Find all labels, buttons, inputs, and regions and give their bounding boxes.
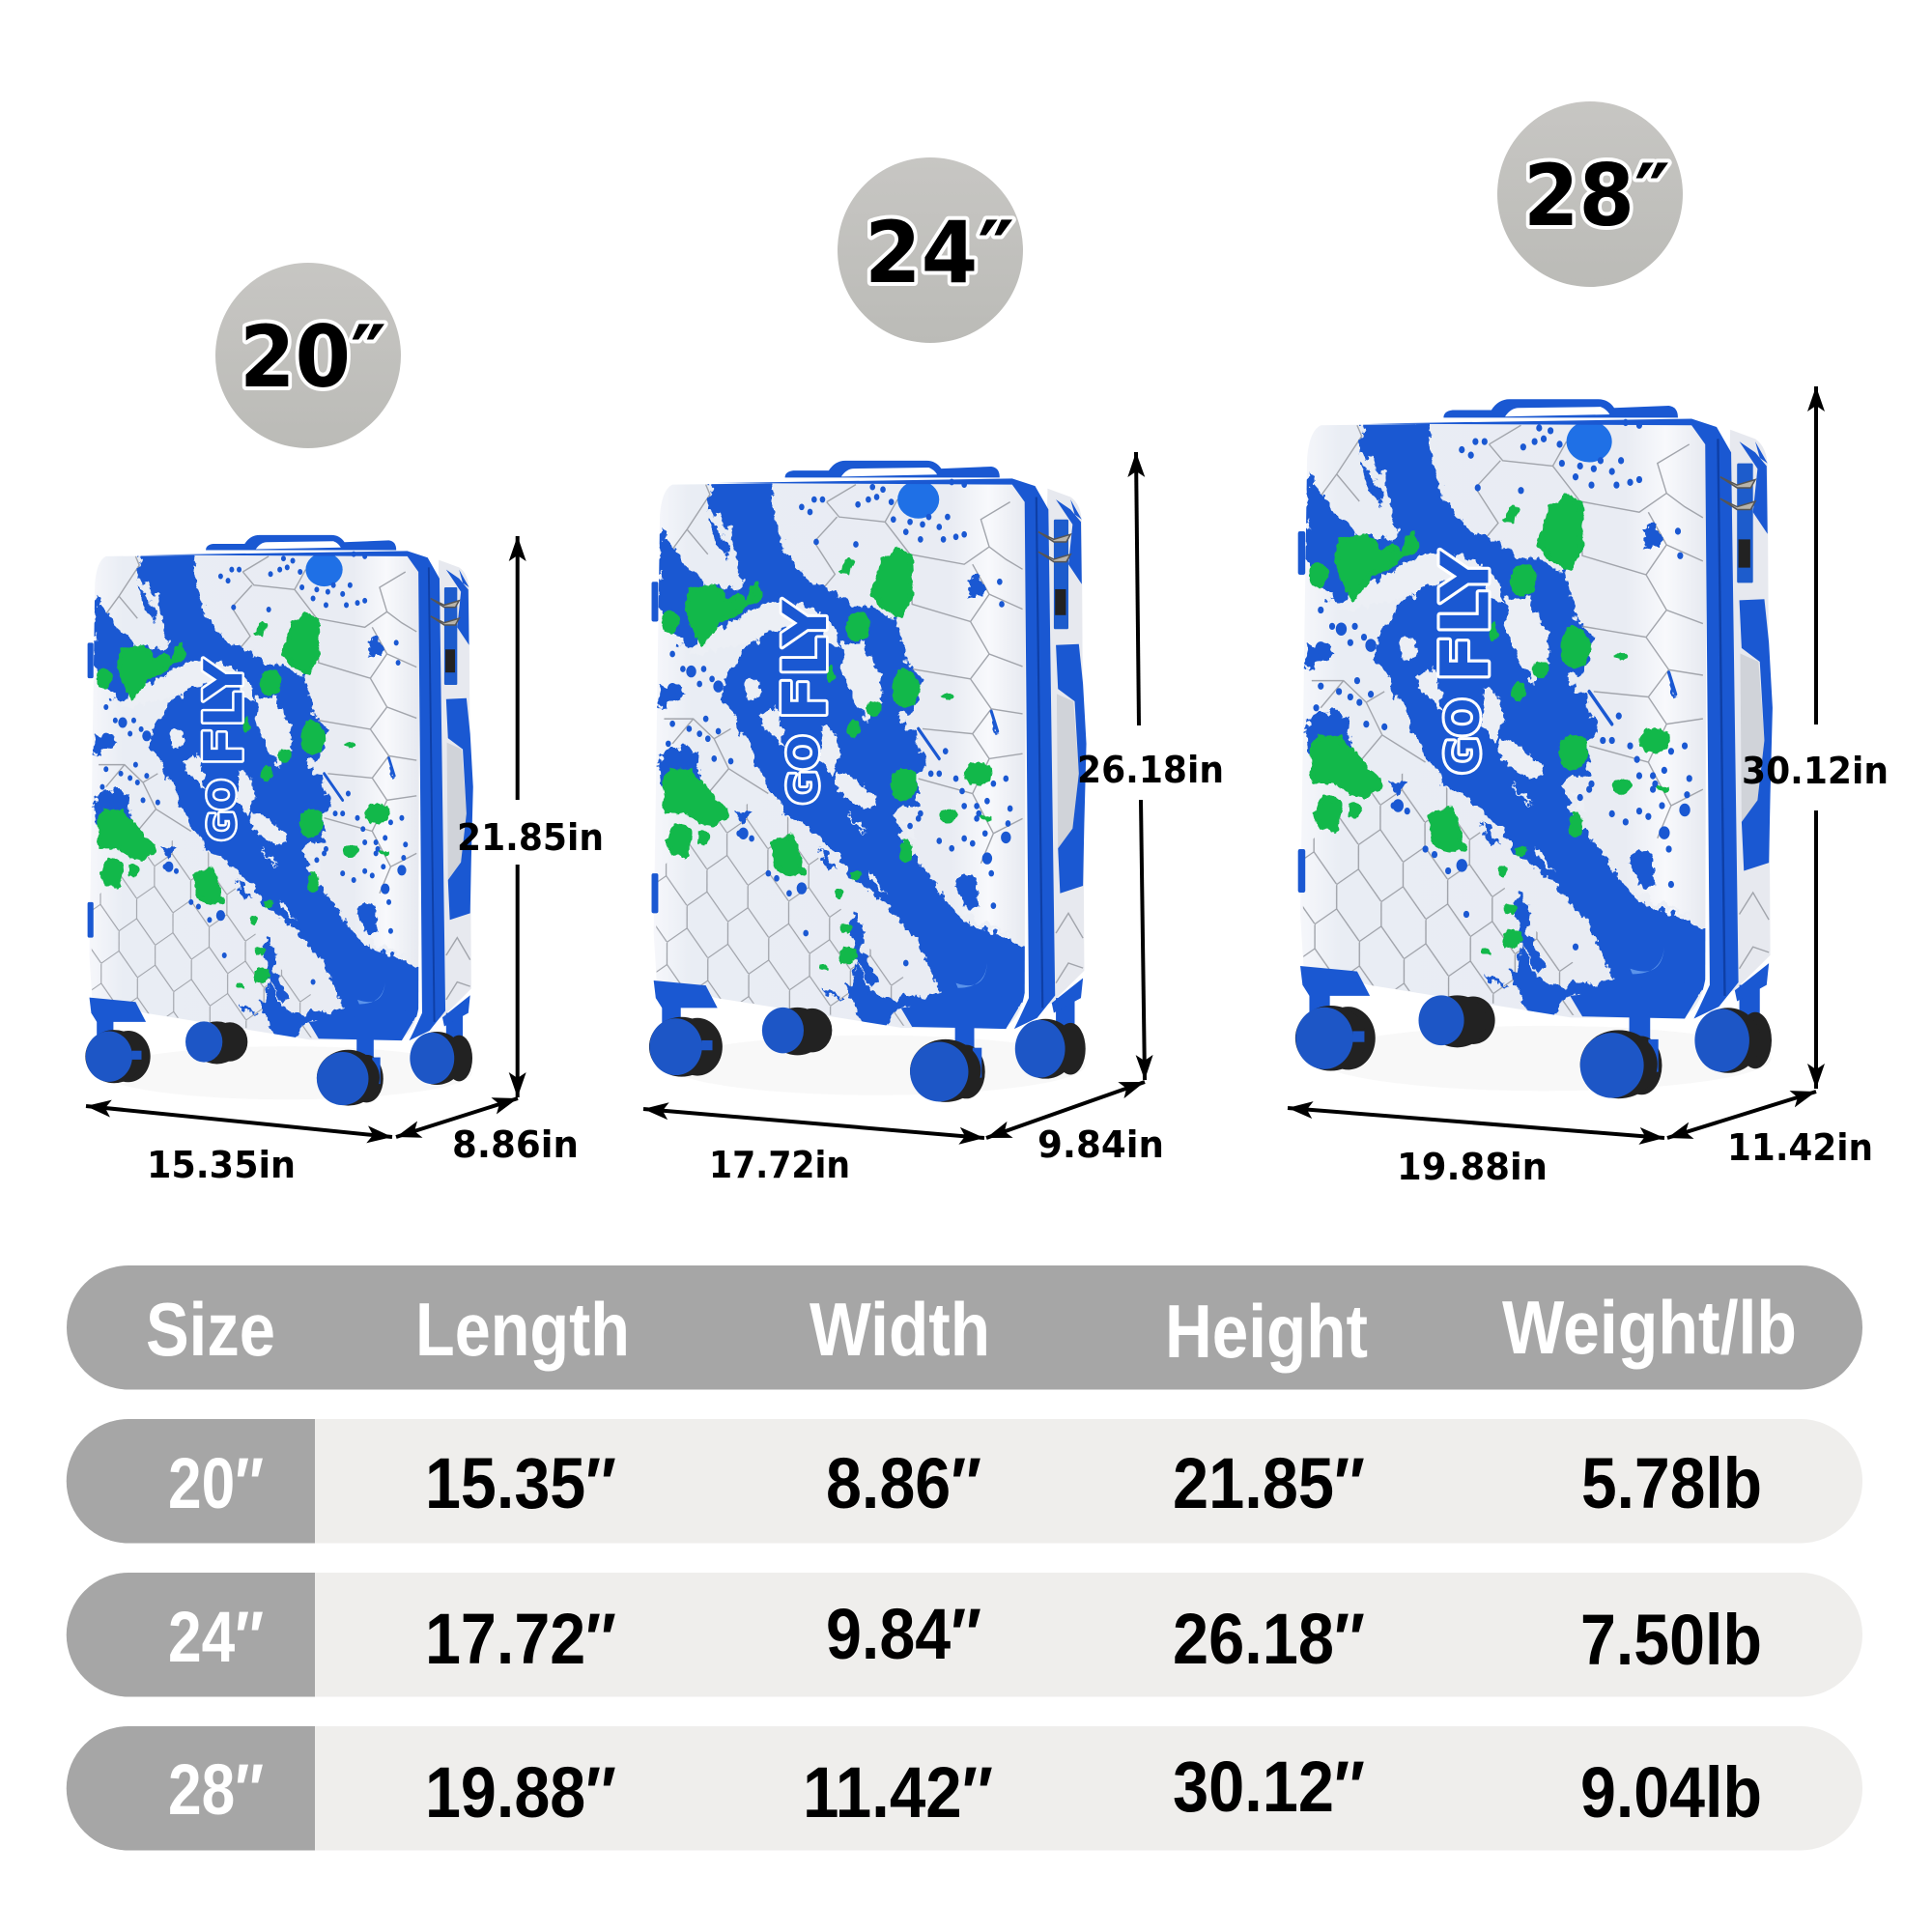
suitcase: 28 inch: FLY (1427, 550, 1504, 682)
table header row: Size (146, 1287, 275, 1372)
arrow: height 20 lower (516, 865, 520, 1097)
suitcase: 24 inch (649, 461, 1087, 1102)
dimensions: 20 inch suitcase (86, 536, 604, 1186)
table row: 24 inch: 9.84″ (826, 1594, 981, 1674)
arrow: height 24 upper (1136, 452, 1139, 725)
table header row: Length (415, 1287, 630, 1372)
label: length 20: 15.35in (147, 1144, 296, 1186)
table row: 24 inch (67, 1573, 1862, 1696)
table row: 24 inch: 26.18″ (1173, 1599, 1365, 1679)
table header row: Width (810, 1287, 990, 1372)
size badge: 28 inch (1497, 101, 1683, 287)
suitcase: 24 inch: FLY (771, 599, 840, 720)
arrow: height 24 lower (1141, 800, 1145, 1080)
table header row (67, 1265, 1862, 1389)
size badge: 28 inch: 28″ (1523, 146, 1670, 245)
table row: 20 inch: 8.86″ (826, 1443, 981, 1523)
suitcase: 28 inch: GO (1437, 698, 1491, 774)
table header row: Weight/lb (1502, 1285, 1797, 1370)
table row: 20 inch: 20″ (168, 1443, 264, 1523)
table row: 20 inch: 15.35″ (425, 1443, 616, 1523)
table row: 28 inch: 11.42″ (803, 1752, 993, 1833)
table row: 28 inch: 19.88″ (425, 1752, 616, 1833)
table row: 20 inch: 21.85″ (1173, 1443, 1365, 1523)
table header row: Height (1165, 1289, 1368, 1374)
label: height 28: 30.12in (1742, 750, 1889, 792)
table row: 24 inch: 7.50lb (1580, 1600, 1762, 1680)
label: length 24: 17.72in (709, 1144, 850, 1186)
arrow: height 28 lower (1814, 810, 1818, 1089)
dimensions: 24 inch suitcase (643, 452, 1224, 1186)
label: height 20: 21.85in (457, 816, 604, 859)
label: width 24: 9.84in (1037, 1123, 1164, 1166)
arrow: width 20 (396, 1098, 518, 1137)
suitcase: 20 inch (85, 535, 473, 1106)
dimensions: 28 inch suitcase (1288, 386, 1889, 1188)
label: width 28: 11.42in (1727, 1126, 1873, 1169)
table row: 28 inch: 9.04lb (1580, 1752, 1762, 1833)
table row: 28 inch: 30.12″ (1173, 1747, 1365, 1827)
table row: 28 inch: 28″ (168, 1749, 264, 1830)
suitcase: 20 inch: FLY (193, 659, 255, 766)
table row: 24 inch: 24″ (168, 1597, 264, 1677)
arrow: length 28 (1288, 1108, 1664, 1138)
table row: 24 inch: 17.72″ (425, 1599, 616, 1679)
arrow: height 28 upper (1814, 386, 1818, 724)
size badge: 24 inch (838, 157, 1023, 343)
label: height 24: 26.18in (1077, 749, 1224, 791)
table row: 28 inch (67, 1726, 1862, 1851)
suitcase: 20 inch: GO (201, 779, 243, 841)
arrow: height 20 upper (516, 536, 520, 800)
suitcase: 28 inch (1295, 399, 1773, 1098)
suitcase: 24 inch: GO (780, 735, 828, 805)
arrow: width 28 (1667, 1092, 1816, 1138)
arrow: width 24 (986, 1082, 1145, 1138)
label: length 28: 19.88in (1397, 1146, 1548, 1188)
table row: 20 inch (67, 1419, 1862, 1544)
size badge: 24 inch: 24″ (865, 203, 1014, 302)
size badge: 20 inch: 20″ (240, 307, 386, 407)
label: width 20: 8.86in (452, 1123, 579, 1166)
table row: 20 inch: 5.78lb (1581, 1443, 1762, 1523)
arrow: length 24 (643, 1109, 984, 1138)
size badge: 20 inch (215, 263, 401, 448)
arrow: length 20 (86, 1106, 392, 1137)
